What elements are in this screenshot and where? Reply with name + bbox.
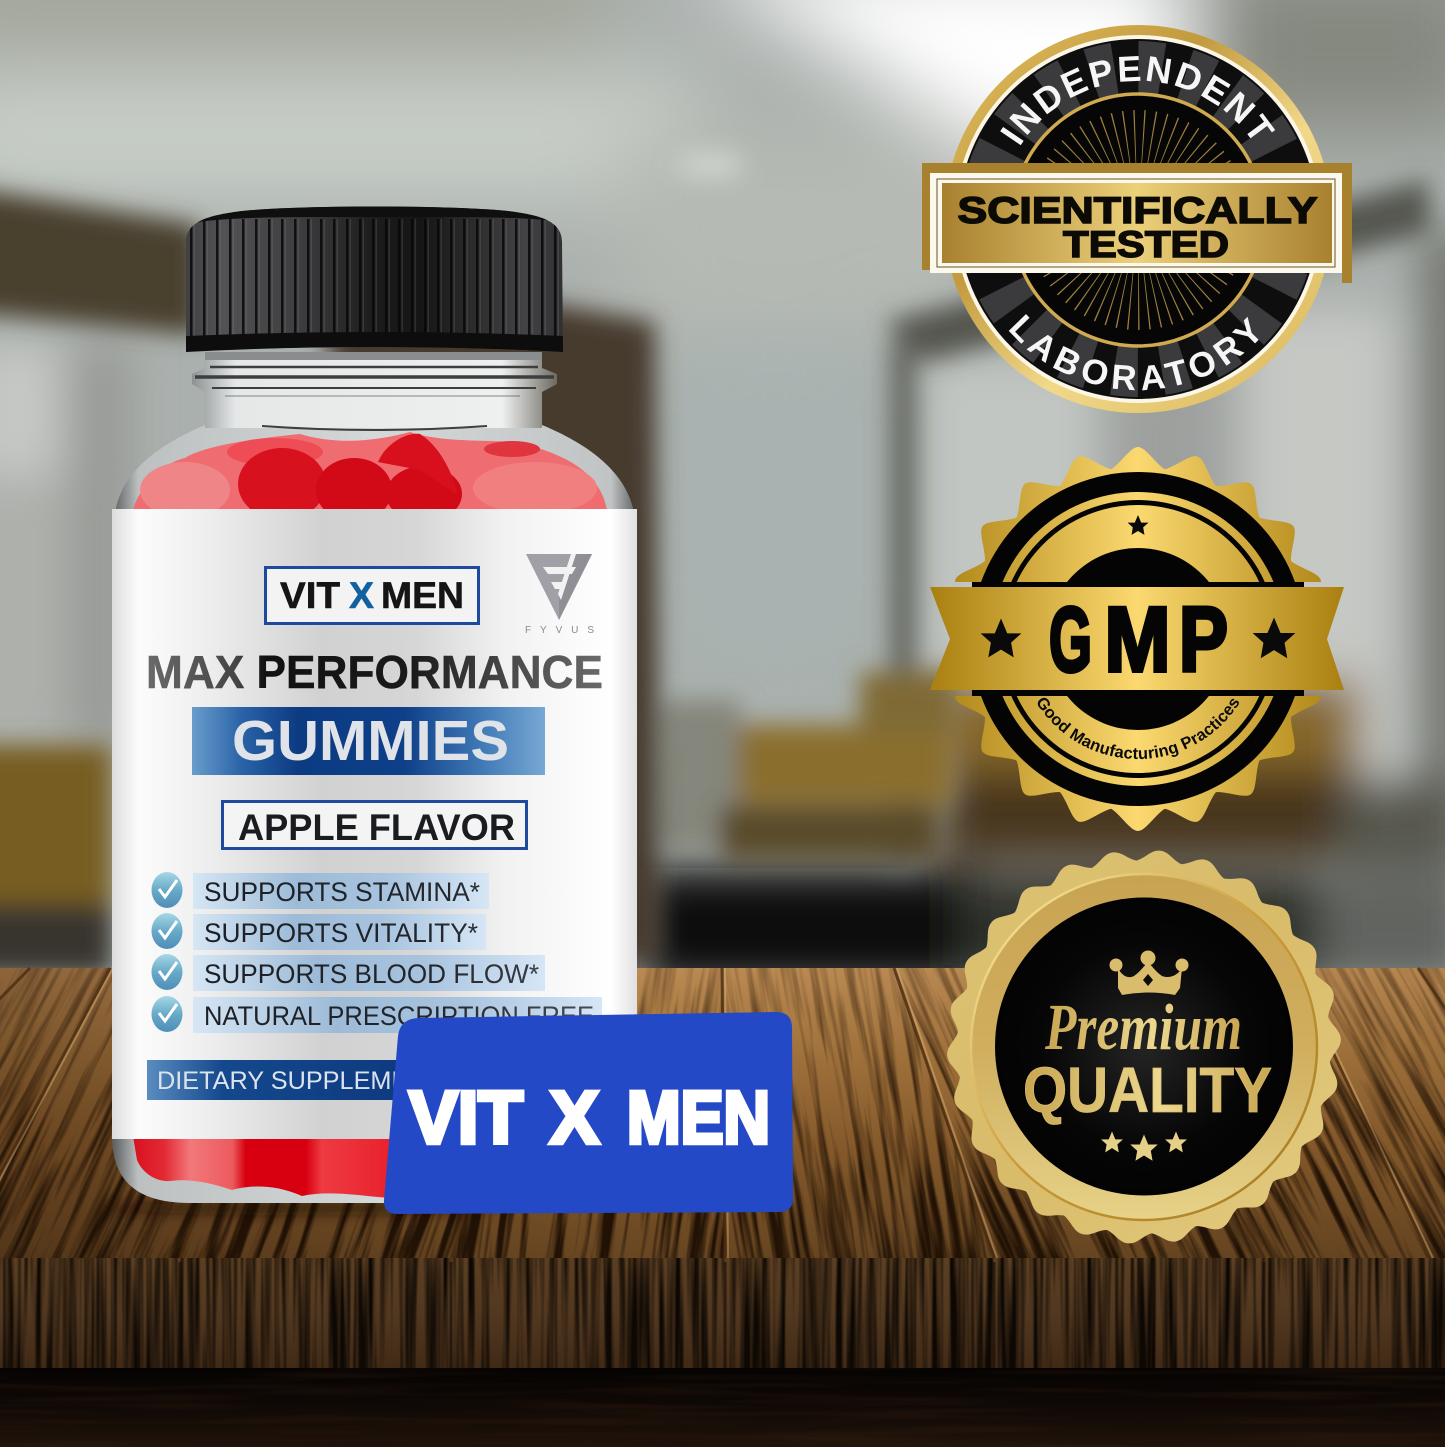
gold ribbon: TESTED xyxy=(1063,224,1229,265)
inner gold ring xyxy=(1012,94,1264,346)
serrated gold seal xyxy=(955,447,1321,831)
wooden table top xyxy=(0,968,1445,1258)
blue brand card: X xyxy=(550,1076,599,1159)
product name: MAX PERFORMANCE xyxy=(146,646,603,698)
brand box: MEN xyxy=(381,575,464,616)
bottle glass body xyxy=(112,425,637,1203)
highlight line xyxy=(971,874,1317,1220)
gold ribbon: SCIENTIFICALLY xyxy=(958,190,1318,231)
flavor box: APPLE FLAVOR xyxy=(238,807,515,848)
three stars xyxy=(1101,1132,1187,1161)
table front face xyxy=(0,1258,1445,1368)
blue brand card: VIT xyxy=(409,1076,523,1159)
gummies banner: GUMMIES xyxy=(232,709,509,773)
blue brand card xyxy=(384,1012,793,1214)
dietary supplement bar: DIETARY SUPPLEMENT xyxy=(157,1067,442,1095)
grey wedges xyxy=(986,67,1290,371)
gold ribbon: M xyxy=(1104,589,1170,691)
benefit: natural: NATURAL PRESCRIPTION FREE xyxy=(204,1001,594,1031)
black ring xyxy=(971,472,1305,806)
paper label xyxy=(112,509,637,1139)
black disc xyxy=(995,898,1293,1196)
arc text: independent: INDEPENDENT xyxy=(1000,56,1276,146)
brand box: X xyxy=(349,575,374,616)
bottle cap xyxy=(186,206,564,352)
quality wordmark: QUALITY xyxy=(1023,1054,1272,1126)
brand box: VIT xyxy=(280,575,340,616)
benefit: vitality xyxy=(152,913,486,950)
gold ribbon xyxy=(930,587,1344,691)
benefit: natural xyxy=(152,996,602,1033)
gold ring xyxy=(991,492,1285,786)
table underside xyxy=(0,1368,1445,1447)
gold outer ring xyxy=(944,25,1332,413)
brand box xyxy=(266,568,478,624)
benefit: vitality: SUPPORTS VITALITY* xyxy=(204,918,478,948)
top star xyxy=(1128,515,1148,535)
dietary supplement bar xyxy=(147,1060,442,1100)
white ring xyxy=(954,35,1322,403)
benefit: blood flow xyxy=(152,954,545,991)
gold ribbon xyxy=(922,163,1352,283)
FYVUS logo: FYVUS xyxy=(525,625,594,636)
badge: premium quality xyxy=(940,845,1350,1250)
benefit: stamina xyxy=(152,872,489,909)
bottle shadow xyxy=(100,1201,500,1215)
gummies top xyxy=(133,432,607,522)
scalloped gold seal xyxy=(940,845,1350,1250)
gummies bottom xyxy=(133,1136,395,1198)
premium script: Premium xyxy=(1044,991,1242,1064)
black ring xyxy=(958,39,1318,399)
arc text: laboratory: LABORATORY xyxy=(1008,314,1259,390)
gold ribbon: G xyxy=(1049,589,1092,691)
ribbon shadow strips xyxy=(972,582,1304,696)
inner black circle xyxy=(1047,548,1229,730)
benefit: blood flow: SUPPORTS BLOOD FLOW* xyxy=(204,959,539,989)
gold ribbon: P xyxy=(1179,589,1228,691)
crown icon xyxy=(1110,950,1188,995)
glass neck xyxy=(192,352,557,430)
gold ring xyxy=(971,874,1317,1220)
product bottle xyxy=(100,206,637,1215)
benefit: stamina: SUPPORTS STAMINA* xyxy=(204,877,480,907)
benefit list xyxy=(152,872,602,1033)
badge: GMP xyxy=(930,447,1344,831)
blue brand card: MEN xyxy=(627,1076,770,1159)
sunburst rays xyxy=(1083,165,1193,275)
thin black ring xyxy=(1002,502,1274,776)
badge: scientifically tested xyxy=(922,25,1352,413)
FYVUS logo xyxy=(525,554,594,636)
blurred room background xyxy=(0,0,1445,988)
arc text: Good Manufacturing Practices xyxy=(1038,698,1239,760)
